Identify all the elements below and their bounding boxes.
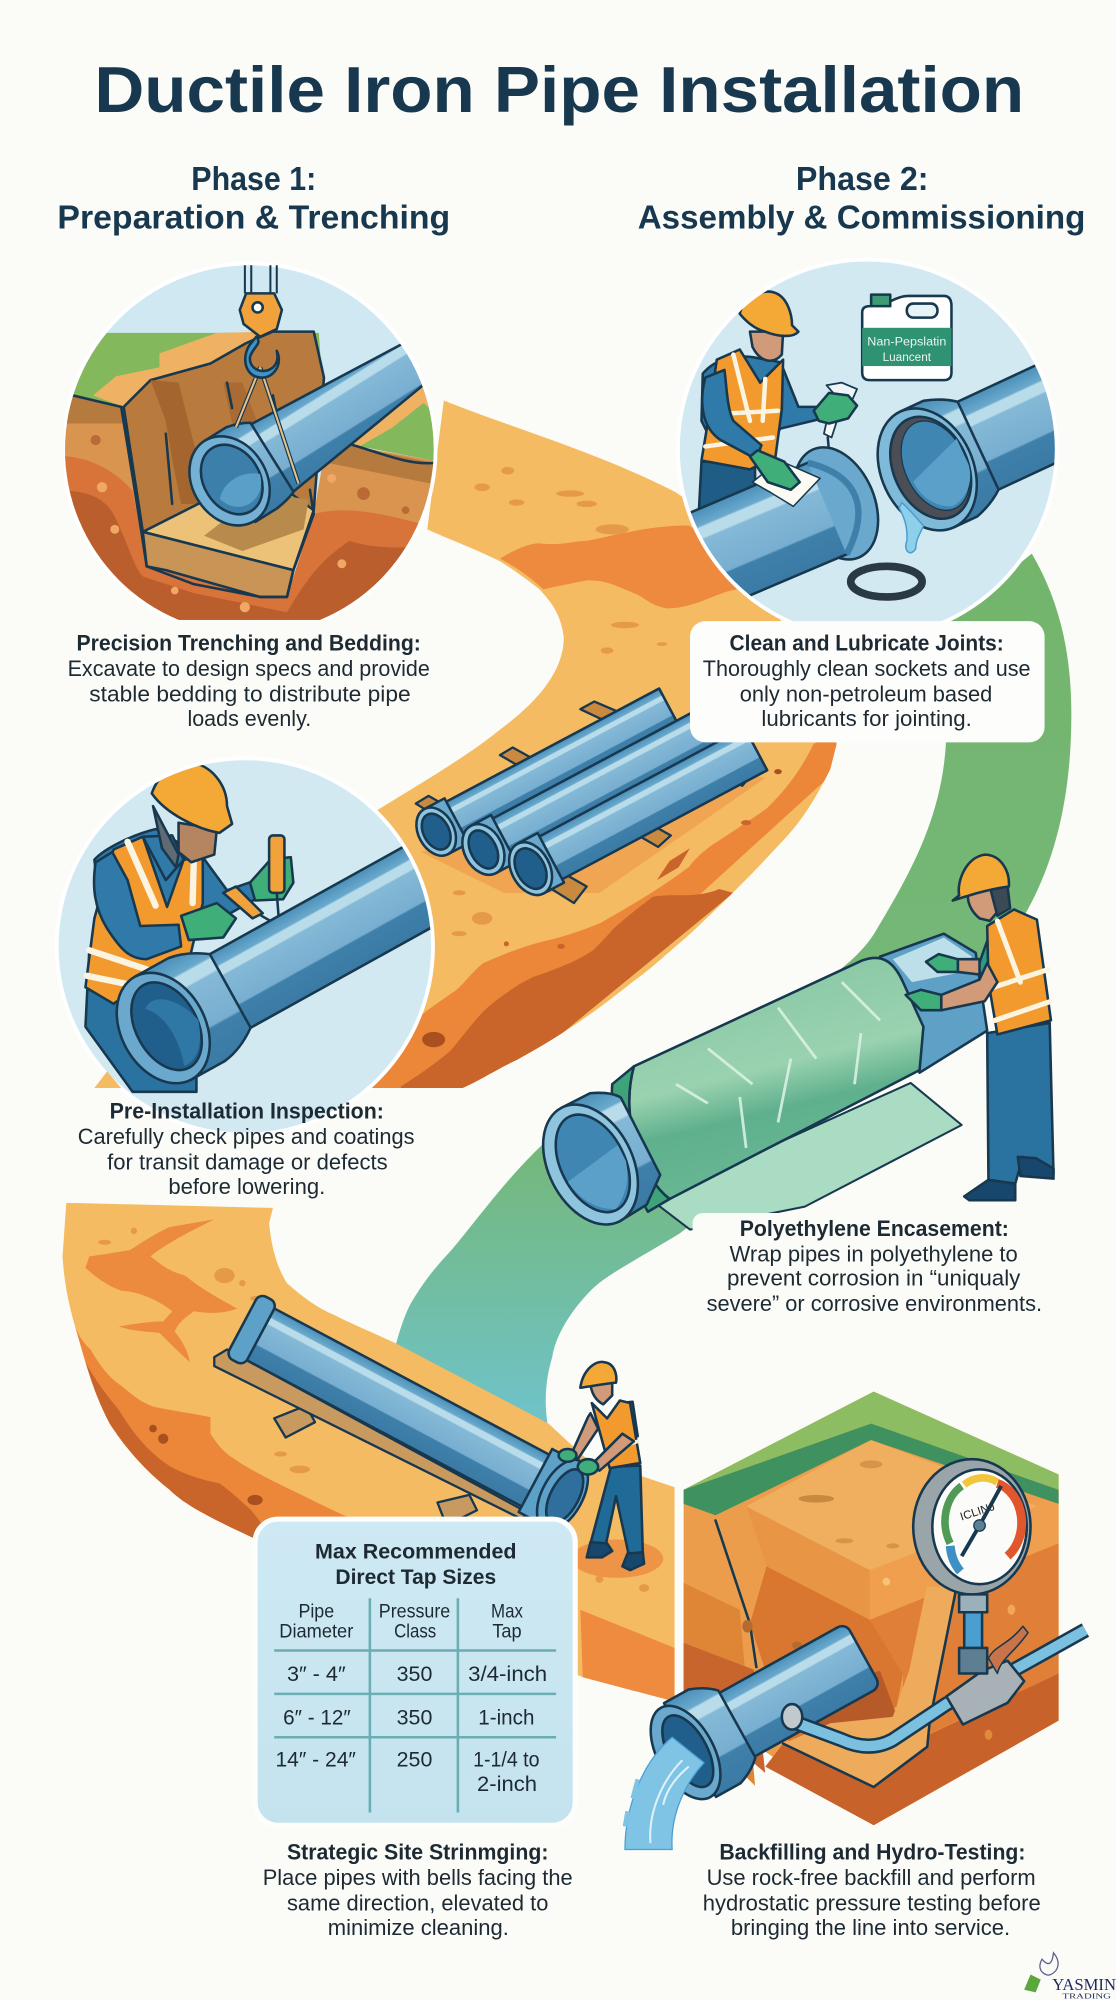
panel: max recommended direct tap sizes table: [255, 1519, 575, 1825]
table title: [315, 1539, 517, 1589]
table rows: 6″ - 12″: [283, 1704, 351, 1729]
orange splash: [85, 1219, 237, 1362]
earth road: lower section: [62, 1202, 675, 1700]
text: pre-installation inspection: Carefully check pipes and coatings: [78, 1124, 415, 1149]
table rows: 1-inch: [478, 1704, 534, 1729]
table rows: 14″ - 24″: [275, 1747, 356, 1772]
pressure gauge: [913, 1459, 1031, 1594]
text: pre-installation inspection: before lowering.: [168, 1174, 325, 1199]
table title: Max Recommended: [315, 1539, 517, 1564]
worker: [906, 855, 1054, 1200]
text: strategic site stringing: same direction, elevated to: [287, 1891, 548, 1916]
logo: Yasmin Trading: [1024, 1953, 1116, 2000]
logo: Yasmin Trading: YASMIN: [1052, 1975, 1116, 1994]
text: polyethylene encasement: Polyethylene Encasement:: [740, 1216, 1009, 1241]
text: backfilling and hydro-testing: [703, 1840, 1041, 1940]
lubricant jug: Nan-Pepslatin: [867, 335, 946, 349]
text: precision trenching and bedding: Precision Trenching and Bedding:: [77, 631, 421, 656]
text: backfilling and hydro-testing: hydrostatic pressure testing before: [703, 1891, 1041, 1916]
heading: phase 1: Phase 1:: [191, 161, 316, 198]
soil layers: [65, 396, 434, 620]
inspected pipe: [116, 846, 430, 1084]
text: backfilling and hydro-testing: bringing the line into service.: [731, 1915, 1010, 1940]
text: clean and lubricate joints: only non-petroleum based: [740, 682, 992, 707]
trench wall: [124, 332, 324, 532]
pipe fittings: [782, 1594, 1028, 1730]
table headers: [279, 1601, 523, 1643]
text: backfilling and hydro-testing: Use rock-free backfill and perform: [707, 1865, 1036, 1890]
table headers: Diameter: [279, 1622, 354, 1643]
table rows: 250: [397, 1747, 432, 1772]
table rows: 350: [397, 1661, 432, 1686]
sand bedding: [144, 494, 316, 571]
illustration: circle 2 worker cleaning joint: [680, 262, 1055, 622]
text: strategic site stringing: [263, 1840, 573, 1940]
illustration: polyethylene wrapped pipe: [524, 855, 1054, 1240]
lubricant jug: Luancent: [883, 350, 932, 364]
table rows: 2-inch: [477, 1771, 537, 1796]
cloth and glove: [750, 450, 820, 506]
polyethylene sheet on ground: [652, 1083, 962, 1230]
pressure gauge: ICLINJ: [959, 1501, 996, 1523]
wrapped barrel: [629, 958, 923, 1199]
test pipe: [635, 1607, 889, 1813]
rust rim: [85, 1362, 261, 1538]
worker body: [699, 292, 857, 510]
table headers: Max: [491, 1601, 523, 1622]
rubber gasket: [851, 566, 922, 597]
left pipe with bell: [690, 446, 880, 596]
orange rim: [74, 1326, 347, 1538]
text: precision trenching and bedding: Excavate to design specs and provide: [68, 656, 430, 681]
lubricant drip: [899, 503, 923, 553]
table rows: 1-1/4 to: [473, 1747, 540, 1772]
pipe being lowered: [188, 344, 423, 527]
text: clean and lubricate joints: Clean and Lubricate Joints:: [730, 631, 1004, 656]
table rows: 350: [397, 1704, 432, 1729]
table rows: [275, 1661, 547, 1796]
heading: phase 2: Phase 2:: [796, 161, 929, 198]
table headers: Tap: [492, 1622, 522, 1643]
bare pipe end: [880, 934, 987, 1073]
service line: [797, 1630, 1085, 1746]
card: clean and lubricate joints: [690, 621, 1045, 742]
text: clean and lubricate joints: lubricants for jointing.: [761, 706, 972, 731]
table rows: 3″ - 4″: [287, 1661, 346, 1686]
road fragment below circle 3: [94, 1071, 121, 1088]
earth road: upper section: [372, 400, 837, 1088]
timber beam: [214, 1349, 528, 1526]
text: precision trenching and bedding: stable bedding to distribute pipe: [89, 682, 411, 707]
table headers: Pressure: [379, 1601, 450, 1622]
text: clean and lubricate joints: [703, 631, 1031, 731]
text: polyethylene encasement: Wrap pipes in polyethylene to: [730, 1241, 1018, 1266]
pipe: [225, 1291, 598, 1538]
stacked pipes on timbers: [408, 685, 769, 903]
text: strategic site stringing: Strategic Site Strinmging:: [287, 1840, 548, 1865]
text: precision trenching and bedding: [68, 631, 430, 731]
text: strategic site stringing: Place pipes with bells facing the: [263, 1865, 573, 1890]
worker torso: [85, 763, 293, 1004]
right pipe socket: [876, 364, 1055, 532]
text: polyethylene encasement: severe” or corrosive environments.: [707, 1291, 1042, 1316]
lubricant jug: [862, 295, 951, 380]
bell end: [524, 1082, 671, 1240]
illustration: circle 1 trench and pipe lowering: [65, 265, 438, 620]
text: backfilling and hydro-testing: Backfilling and Hydro-Testing:: [719, 1840, 1025, 1865]
illustration: pipe on timber with worker: [214, 1291, 644, 1570]
text: pre-installation inspection: Pre-Installation Inspection:: [110, 1099, 384, 1124]
water discharge: [625, 1737, 704, 1849]
pipe row: [408, 685, 681, 863]
grass and strip right of pipe: [354, 386, 434, 460]
illustration: soil block with hydro-test gauge: [625, 1392, 1085, 1849]
text: strategic site stringing: minimize cleaning.: [328, 1915, 509, 1940]
worker ground shadow: [571, 1540, 663, 1578]
green collar: [612, 1066, 670, 1212]
white background behind pre-installation text: [51, 1088, 472, 1203]
table rows: 3/4-inch: [468, 1661, 547, 1686]
worker: [559, 1362, 644, 1570]
table title: Direct Tap Sizes: [335, 1564, 496, 1589]
text: polyethylene encasement: prevent corrosion in “uniqualy: [727, 1266, 1021, 1291]
text: clean and lubricate joints: Thoroughly clean sockets and use: [703, 656, 1031, 681]
pipe shadow: [421, 765, 765, 893]
text: precision trenching and bedding: loads evenly.: [187, 706, 311, 731]
heading: phase 2: Assembly & Commissioning: [638, 199, 1085, 236]
ground grass: [51, 333, 324, 421]
soil block: [684, 1392, 1059, 1825]
text: pre-installation inspection: for transit damage or defects: [107, 1150, 388, 1175]
text: pre-installation inspection: [78, 1099, 415, 1199]
green path: phase 2 route: [389, 554, 1071, 1429]
worker legs: [85, 950, 196, 1092]
table grid: [274, 1598, 556, 1812]
heading: phase 1: [57, 161, 450, 236]
heading: phase 2: [638, 161, 1085, 236]
title: Ductile Iron Pipe Installation: [94, 53, 1024, 126]
heading: phase 1: Preparation & Trenching: [57, 199, 450, 236]
timbers: [416, 702, 755, 903]
table headers: Class: [394, 1622, 436, 1643]
white pad behind polyethylene text: [693, 1213, 1056, 1321]
illustration: circle 3 worker inspecting pipe: [58, 760, 435, 1132]
table headers: Pipe: [298, 1601, 334, 1622]
text: polyethylene encasement: [707, 1216, 1042, 1316]
crane hook and sling: [236, 265, 298, 483]
